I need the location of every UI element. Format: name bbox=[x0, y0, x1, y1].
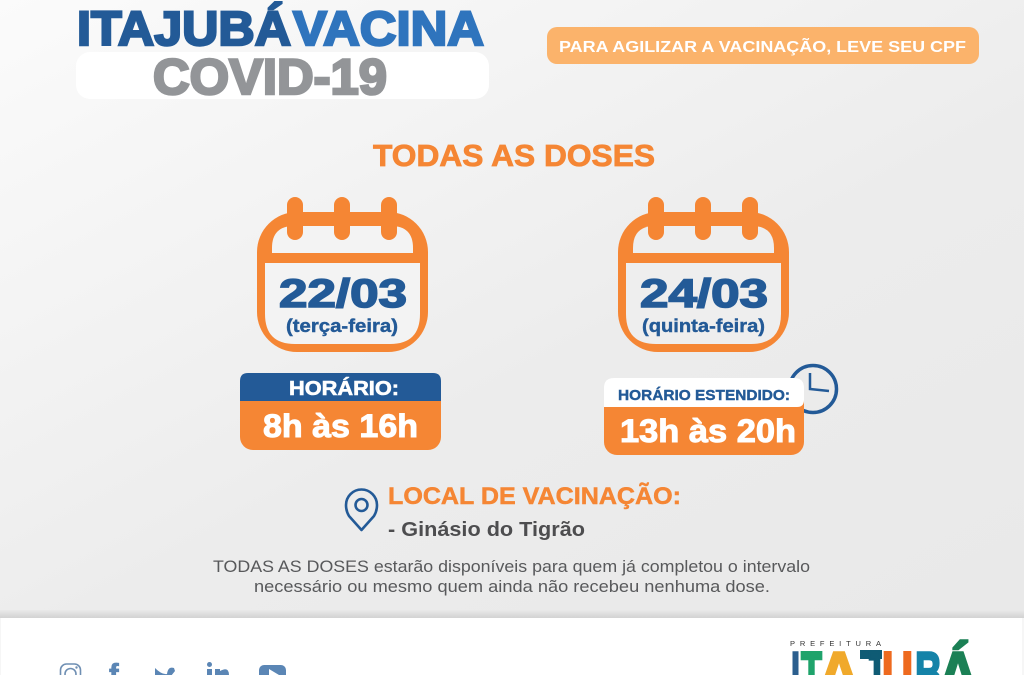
calendar: 24/03: (quinta-feira) bbox=[642, 316, 765, 336]
schedule box: 8h às 16h: HORÁRIO: bbox=[289, 377, 399, 400]
title: Itajubá Vacina COVID-19 bbox=[76, 2, 489, 105]
calendar: 22/03: 22/03 bbox=[279, 272, 407, 316]
callout: leve seu CPF: PARA AGILIZAR A VACINAÇÃO, LEVE SEU CPF bbox=[559, 36, 966, 56]
calendar: 24/03 bbox=[618, 197, 789, 352]
schedule box: 13h às 20h bbox=[604, 378, 804, 455]
logo: Prefeitura Itajubá: PREFEITURA bbox=[790, 639, 881, 648]
title: Itajubá Vacina COVID-19: ITAJUBÁ bbox=[77, 2, 291, 56]
location heading: LOCAL DE VACINAÇÃO: bbox=[388, 482, 681, 510]
calendar: 24/03: 24/03 bbox=[640, 272, 768, 316]
icon: instagram bbox=[60, 664, 80, 675]
calendar: 22/03: (terça-feira) bbox=[286, 316, 398, 336]
explanatory note: TODAS AS DOSES estarão disponíveis para quem já completou o intervalo bbox=[213, 558, 810, 576]
explanatory note bbox=[213, 558, 810, 596]
icon: location pin bbox=[346, 489, 377, 530]
explanatory note: necessário ou mesmo quem ainda não recebeu nenhuma dose. bbox=[254, 578, 770, 596]
schedule box: 8h às 16h bbox=[240, 373, 441, 450]
icon: twitter bbox=[155, 668, 175, 675]
icon: youtube bbox=[259, 665, 286, 675]
logo: Prefeitura Itajubá bbox=[790, 639, 978, 675]
icon: linkedin bbox=[207, 662, 229, 675]
schedule box: 8h às 16h: 8h às 16h bbox=[263, 408, 418, 444]
schedule box: 13h às 20h: HORÁRIO ESTENDIDO: bbox=[618, 387, 790, 404]
title: Itajubá Vacina COVID-19: VACINA bbox=[293, 3, 484, 56]
title: Itajubá Vacina COVID-19: COVID-19 bbox=[153, 49, 387, 105]
calendar: 22/03 bbox=[257, 197, 428, 352]
heading: todas as doses: TODAS AS DOSES bbox=[373, 138, 655, 173]
icon: clock bbox=[790, 366, 836, 412]
location name: - Ginásio do Tigrão bbox=[388, 519, 585, 541]
schedule box: 13h às 20h: 13h às 20h bbox=[620, 413, 796, 449]
footer panel bbox=[0, 610, 1024, 675]
callout: leve seu CPF bbox=[547, 27, 979, 64]
